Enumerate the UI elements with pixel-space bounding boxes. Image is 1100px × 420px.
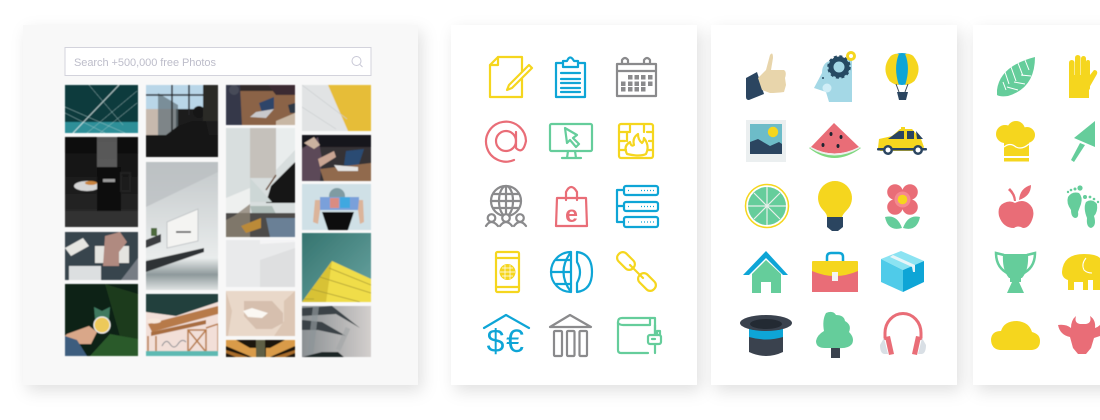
icon: hot air balloon [885, 53, 919, 100]
photo: woman holding magazine [302, 184, 372, 231]
icon: footprints [1067, 185, 1099, 228]
search box [65, 48, 371, 76]
photo: meeting hands and laptop [301, 134, 372, 182]
panel: outline icons [451, 25, 697, 385]
panel: flat colour icons [711, 25, 957, 385]
photo: window silhouette [145, 84, 219, 158]
icon: document and pencil [490, 57, 532, 97]
icon: taxi [877, 127, 927, 155]
panel: photo search [23, 25, 418, 385]
photo: black mug [64, 136, 139, 228]
icon: monitor with cursor [550, 124, 592, 158]
bag letter: e [565, 201, 578, 227]
icon: cloud [991, 321, 1040, 350]
search placeholder text: Search +500,000 free Photos [74, 57, 216, 69]
icon: headphones [880, 313, 926, 355]
euro symbol: € [506, 323, 524, 359]
icon: light bulb [818, 181, 852, 231]
icon: bull head [1058, 316, 1100, 354]
photo grid [65, 85, 371, 357]
icon: lime slice [746, 184, 788, 228]
icon: shopping bag with e [556, 187, 587, 227]
icon: glove [1069, 55, 1097, 98]
photo: create cafe [145, 293, 219, 357]
icon: leaf [997, 57, 1035, 96]
icon: chef hat [996, 121, 1035, 162]
photo: pineapple sticker [64, 283, 139, 357]
photo: yellow and grey abstract [302, 84, 372, 132]
icon: firewall [619, 124, 653, 158]
photo: white shelf with frame [145, 162, 218, 290]
icon: thumbs up [746, 54, 786, 100]
icon: house with dollar and euro [484, 315, 529, 359]
icon: bank columns [550, 315, 591, 356]
icon: elephant [1062, 254, 1100, 290]
panel: glyph icons [973, 25, 1100, 385]
icon: flower [885, 184, 920, 229]
icon: search [352, 56, 362, 67]
icon: watermelon [809, 123, 861, 158]
photo: orange lit corridor [225, 339, 296, 358]
icon: smartphone with globe [496, 252, 519, 292]
icon: briefcase [812, 253, 858, 292]
icon: cardboard box [881, 251, 924, 292]
icon: chain link [615, 250, 658, 293]
photo: staircase [225, 128, 296, 238]
icon: head with gears [814, 52, 854, 102]
photo: laptops on table [225, 84, 296, 126]
icon: calendar [617, 58, 656, 96]
icon: at sign [486, 122, 526, 162]
icon: trophy [996, 253, 1035, 293]
icon: wallet [618, 318, 661, 353]
icon: apple [999, 185, 1033, 228]
icon: house [743, 251, 788, 293]
icon: globe and people [486, 186, 526, 226]
photo: white wall corner [226, 240, 296, 288]
photo: hands over paper [64, 231, 139, 281]
icon: globe and telephone [551, 252, 592, 292]
photo: teal glass lines [64, 84, 139, 134]
icon: trowel [1071, 121, 1095, 162]
icon: server stack [617, 186, 658, 227]
icon: tree [816, 312, 853, 358]
photo: beige ceiling skylight [226, 290, 296, 336]
icon: top hat [740, 315, 792, 356]
icon: clipboard [556, 58, 585, 97]
icon: picture [746, 120, 786, 162]
photo: yellow building teal sky [301, 232, 372, 303]
dollar symbol: $ [487, 323, 505, 359]
photo: blurred leaves shadow [301, 305, 372, 358]
